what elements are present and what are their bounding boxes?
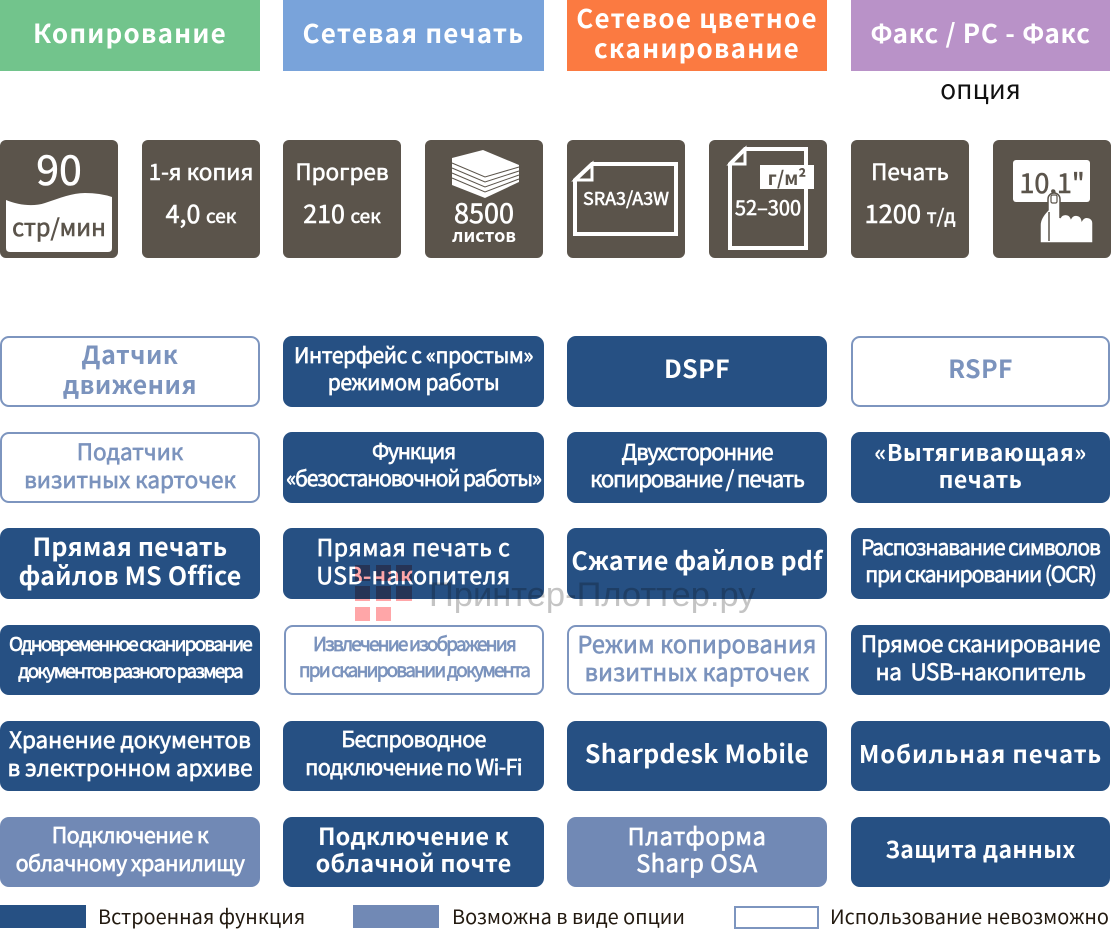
feature: Sharp OSA: Платформа xyxy=(628,818,766,852)
feature: Двухсторонние: Двухсторонние xyxy=(622,434,772,466)
feature: mixed-size scan: документов разного размера xyxy=(18,657,242,684)
feature: pdf xyxy=(567,528,827,599)
feature: Sharpdesk Mobile xyxy=(567,721,827,791)
spec tile: first copy: 1-я копия xyxy=(149,155,253,187)
spec tile: SRA3/A3W format xyxy=(567,140,685,258)
feature: archive: Хранение документов xyxy=(9,723,251,755)
watermark: Принтер-Плоттер.ру xyxy=(429,576,756,614)
feature: OCR xyxy=(851,528,1110,599)
feature: image extraction: при сканировании документа xyxy=(299,656,529,683)
feature: cloud mail: облачной почте xyxy=(316,845,511,879)
feature: DSPF: DSPF xyxy=(664,350,730,386)
legend text: built-in: Встроенная функция xyxy=(98,901,305,930)
spec tile: 90 стр/мин xyxy=(0,140,118,258)
spec tile: print resolution: 1200 т/д xyxy=(864,194,956,231)
feature: Интерфейс: режимом работы xyxy=(328,366,499,396)
feature: Вытягивающая печать xyxy=(851,432,1110,503)
legend: built-in xyxy=(0,905,86,928)
feature: MS Office: файлов MS Office xyxy=(19,556,241,592)
feature: mobile print: Мобильная печать xyxy=(859,734,1102,770)
spec tile: paper capacity xyxy=(425,140,543,258)
feature: mixed-size scan: Одновременное сканирование xyxy=(9,630,251,657)
feature: scan to USB: на USB-накопитель xyxy=(876,655,1085,687)
feature: archive: в электронном архиве xyxy=(7,751,253,783)
spec tile: paper weight: г/м² xyxy=(768,164,806,191)
spec tile: SRA3/A3W format: SRA3/A3W xyxy=(583,185,669,211)
spec tile: warm-up: Прогрев xyxy=(295,155,389,187)
feature: archive xyxy=(0,721,260,791)
legend: option xyxy=(353,905,439,928)
header: Копирование: Копирование xyxy=(33,14,227,50)
spec tile: print resolution: Печать xyxy=(871,155,949,187)
spec tile: paper capacity: листов xyxy=(452,222,516,248)
feature: card copy mode xyxy=(567,625,827,695)
feature: USB print: Прямая печать с xyxy=(317,528,510,562)
spec tile: 90 стр/мин: стр/мин xyxy=(12,209,106,243)
feature: data protection: Защита данных xyxy=(885,830,1076,864)
feature: pdf: Сжатие файлов pdf xyxy=(571,542,823,578)
feature: Датчик движения: Датчик xyxy=(82,336,178,372)
spec tile: warm-up xyxy=(283,140,401,258)
legend: unavailable xyxy=(734,906,819,929)
feature: Податчик визитных карточек xyxy=(0,432,260,503)
feature: card copy mode: Режим копирования xyxy=(578,626,816,660)
spec tile: print resolution xyxy=(851,140,969,258)
feature: Sharp OSA: Sharp OSA xyxy=(636,845,758,879)
feature: scan to USB xyxy=(851,625,1110,695)
feature: Безостановочная работа: Функция xyxy=(372,436,455,466)
feature: mixed-size scan xyxy=(0,625,260,695)
header: Сетевое цветное сканирование xyxy=(567,0,827,71)
feature: cloud mail xyxy=(283,817,544,887)
spec tile: paper weight xyxy=(709,140,827,258)
feature: RSPF xyxy=(851,336,1110,407)
feature: Wi-Fi: подключение по Wi-Fi xyxy=(305,751,522,782)
spec tile: touch screen: 10,1" xyxy=(1019,162,1085,201)
feature: Двухсторонние: копирование / печать xyxy=(590,462,804,494)
feature: mobile print xyxy=(851,721,1110,791)
feature: DSPF xyxy=(567,336,827,407)
feature: Датчик движения xyxy=(0,336,260,407)
feature: Податчик визитных карточек: визитных карточек xyxy=(24,462,236,494)
header: Сетевая печать xyxy=(283,0,544,71)
feature: image extraction xyxy=(284,625,544,695)
feature: RSPF: RSPF xyxy=(948,350,1013,386)
spec tile: first copy: 4,0 сек xyxy=(166,195,237,231)
feature: Податчик визитных карточек: Податчик xyxy=(77,434,183,466)
feature: OCR: Распознавание символов xyxy=(861,532,1100,562)
feature: cloud storage: Подключение к xyxy=(52,819,208,850)
feature: Sharp OSA xyxy=(567,817,827,887)
feature: Безостановочная работа: «безостановочной работы» xyxy=(286,462,541,492)
feature: Wi-Fi: Беспроводное xyxy=(341,723,486,754)
watermark xyxy=(355,565,756,621)
legend text: option: Возможна в виде опции xyxy=(452,901,685,930)
feature: Датчик движения: движения xyxy=(63,366,197,402)
header: Факс / PC - Факс xyxy=(851,0,1110,71)
feature: Вытягивающая печать: печать xyxy=(939,460,1022,494)
feature: USB print xyxy=(283,528,544,599)
feature: MS Office: Прямая печать xyxy=(33,528,227,564)
feature: Интерфейс xyxy=(283,336,544,407)
feature: scan to USB: Прямое сканирование xyxy=(861,627,1100,659)
feature: USB print: USB-накопителя xyxy=(316,556,511,590)
feature: Вытягивающая печать: «Вытягивающая» xyxy=(874,434,1087,468)
feature: OCR: при сканировании (OCR) xyxy=(865,558,1096,588)
feature: Двухсторонние xyxy=(567,432,827,503)
feature: data protection xyxy=(851,817,1110,887)
feature: MS Office xyxy=(0,528,260,599)
header: Факс / PC - Факс: Факс / PC - Факс xyxy=(870,14,1091,50)
feature: cloud mail: Подключение к xyxy=(318,818,509,852)
feature: card copy mode: визитных карточек xyxy=(585,654,809,688)
feature: Sharpdesk Mobile: Sharpdesk Mobile xyxy=(585,734,809,770)
feature: image extraction: Извлечение изображения xyxy=(313,630,515,657)
spec tile: first copy xyxy=(142,140,260,258)
header: Копирование xyxy=(0,0,260,71)
spec tile: paper capacity: 8500 xyxy=(454,192,514,231)
spec tile: touch screen xyxy=(993,140,1111,258)
feature: cloud storage: облачному хранилищу xyxy=(16,847,244,878)
header: Сетевое цветное сканирование: сканирование xyxy=(594,28,800,66)
feature: Безостановочная работа xyxy=(283,432,544,503)
spec tile: paper weight: 52–300 xyxy=(735,192,801,221)
feature: Wi-Fi xyxy=(283,721,544,791)
feature: cloud storage xyxy=(0,817,260,887)
feature: Интерфейс: Интерфейс с «простым» xyxy=(294,340,533,370)
spec tile: warm-up: 210 сек xyxy=(303,195,381,231)
option label: опция xyxy=(940,68,1021,107)
legend text: unavailable: Использование невозможно xyxy=(830,901,1109,930)
header: Сетевая печать: Сетевая печать xyxy=(303,14,524,50)
